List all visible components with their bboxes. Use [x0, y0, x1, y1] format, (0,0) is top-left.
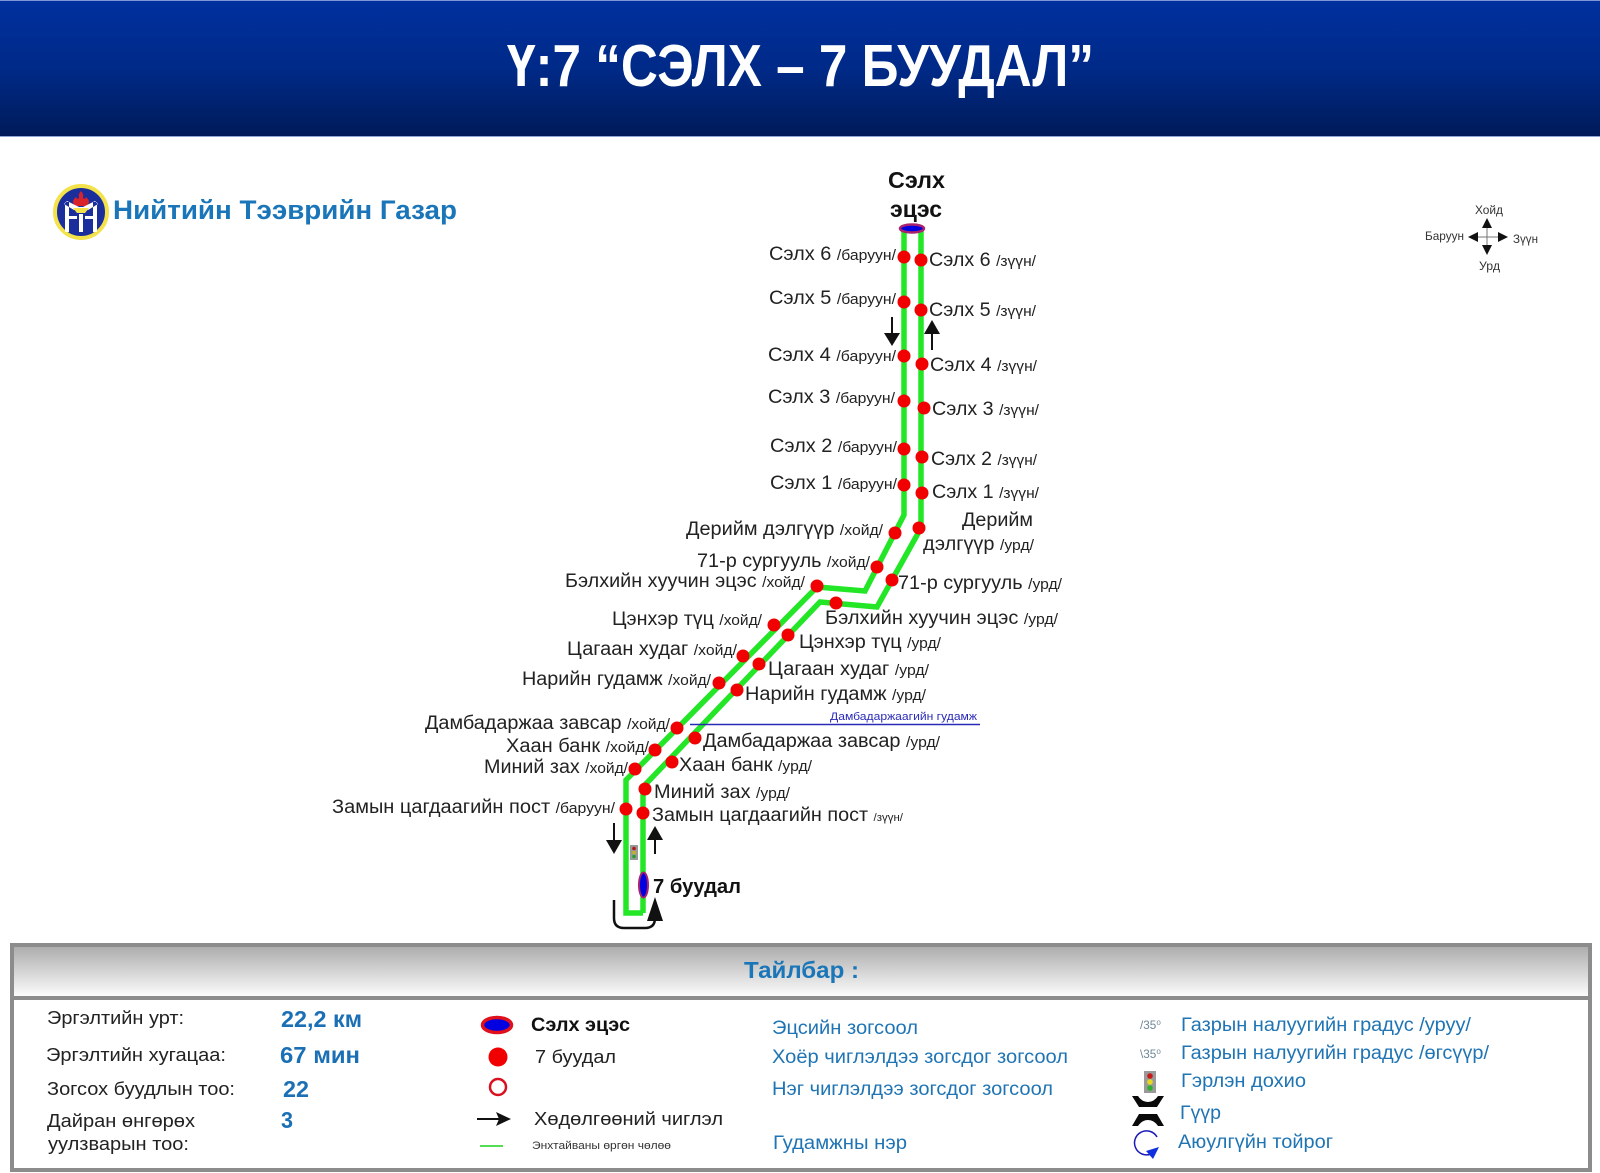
compass [1425, 203, 1538, 273]
route line: eastbound [643, 228, 921, 913]
map symbols [1132, 1015, 1490, 1159]
map symbols: \35⁰ [1140, 1047, 1161, 1061]
stop labels: east side: Сэлх 1 /зүүн/ [932, 482, 1040, 503]
stop labels: west side: Бэлхийн хуучин эцэс /хойд/ [565, 571, 806, 592]
stop type descriptions: Гудамжны нэр [773, 1133, 907, 1154]
icon: traffic light on route [630, 845, 638, 860]
route map [332, 167, 1063, 928]
route statistics: уулзварын тоо: [48, 1133, 189, 1154]
compass: Баруун [1425, 229, 1464, 243]
legend symbols: Энхтайваны өргөн чөлөө [532, 1140, 671, 1152]
title: Ү:7 “СЭЛХ – 7 БУУДАЛ” [507, 33, 1094, 99]
stop labels: east side: Сэлх 6 /зүүн/ [929, 250, 1037, 271]
street line: Дамбадаржаа: Дамбадаржаагийн гудамж [830, 711, 978, 723]
stop labels: west side: Сэлх 6 /баруун/ [769, 244, 897, 265]
stop labels: west side: Сэлх 3 /баруун/ [768, 387, 896, 408]
stop labels: east side: Дерийм [962, 510, 1033, 531]
arrow: northbound bottom [647, 826, 663, 854]
arrow: southbound bottom [606, 823, 622, 854]
stop type descriptions: Хоёр чиглэлдээ зогсдог зогсоол [772, 1047, 1068, 1068]
stop labels: west side: Цагаан худаг /хойд/ [567, 639, 738, 660]
route statistics: Зогсох буудлын тоо: [47, 1078, 235, 1099]
stop labels: west side: Хаан банк /хойд/ [506, 736, 650, 757]
map symbols: Аюулгүйн тойрог [1178, 1132, 1333, 1153]
stop labels: west side: Дерийм дэлгүүр /хойд/ [686, 519, 884, 540]
stop labels: west side: Замын цагдаагийн пост /баруун/ [332, 797, 616, 818]
stop labels: east side: Замын цагдаагийн пост /зүүн/ [652, 805, 904, 826]
compass: Хойд [1475, 203, 1503, 217]
stop labels: east side: 71-р сургууль /урд/ [898, 573, 1063, 594]
stop labels: west side: Сэлх 4 /баруун/ [768, 345, 897, 366]
arrow: southbound top [884, 317, 900, 346]
icon: roundabout [1135, 1131, 1159, 1159]
header banner [0, 0, 1600, 137]
compass: Зүүн [1513, 232, 1538, 246]
stop labels: east side: Сэлх 3 /зүүн/ [932, 399, 1040, 420]
map symbols: Гүүр [1180, 1103, 1221, 1124]
route statistics [46, 1006, 362, 1154]
icon: bridge [1132, 1096, 1164, 1126]
stop labels: west side: 71-р сургууль /хойд/ [697, 551, 871, 572]
route statistics: 67 мин [280, 1042, 360, 1068]
stop labels: east side: Сэлх 4 /зүүн/ [930, 355, 1038, 376]
stop type descriptions [772, 1018, 1068, 1154]
stops: east side [636, 254, 930, 820]
map symbols: /35⁰ [1140, 1018, 1161, 1032]
route line: westbound [626, 228, 904, 913]
stop labels: west side: Нарийн гудамж /хойд/ [522, 669, 712, 690]
stops: west side [620, 250, 910, 816]
logo and organisation name [55, 186, 457, 238]
stop labels: west side: Сэлх 2 /баруун/ [770, 436, 898, 457]
terminal: Сэлх эцэс: Сэлх [888, 167, 945, 193]
legend symbols [477, 1015, 723, 1152]
stop labels: east side: Цэнхэр түц /урд/ [799, 632, 942, 653]
stop labels: west side: Сэлх 5 /баруун/ [769, 288, 897, 309]
icon: traffic light [1144, 1071, 1156, 1093]
route statistics: 22 [283, 1076, 309, 1102]
icon: organisation emblem [55, 186, 107, 238]
stop labels: west side [332, 244, 898, 818]
route statistics: Эргэлтийн урт: [47, 1007, 184, 1028]
arrow: turnaround at 7 буудал [614, 897, 663, 928]
stop labels: east side: дэлгүүр /урд/ [923, 534, 1035, 555]
compass: Урд [1479, 259, 1500, 273]
stop labels: east side: Сэлх 2 /зүүн/ [931, 449, 1038, 470]
stop labels: west side: Дамбадаржаа завсар /хойд/ [425, 713, 671, 734]
stop labels: east side: Дамбадаржаа завсар /урд/ [703, 731, 941, 752]
legend symbols: 7 буудал [535, 1046, 616, 1067]
stop labels: west side: Миний зах /хойд/ [484, 757, 629, 778]
stop labels: east side: Нарийн гудамж /урд/ [745, 684, 927, 705]
stop labels: east side [652, 250, 1063, 826]
organisation name: Нийтийн Тээврийн Газар [113, 195, 457, 225]
map symbols: Газрын налуугийн градус /өгсүүр/ [1181, 1043, 1490, 1064]
map symbols: Газрын налуугийн градус /уруу/ [1181, 1015, 1472, 1036]
route statistics: 22,2 км [281, 1006, 362, 1032]
legend symbols: Хөдөлгөөний чиглэл [534, 1108, 723, 1129]
route statistics: Эргэлтийн хугацаа: [46, 1044, 226, 1065]
terminal: Сэлх эцэс: эцэс [890, 196, 942, 222]
terminal: Сэлх эцэс [888, 167, 945, 232]
terminal: 7 буудал: 7 буудал [653, 876, 741, 898]
legend symbols: Сэлх эцэс [531, 1015, 630, 1036]
stop labels: east side: Миний зах /урд/ [654, 782, 791, 803]
stop labels: east side: Сэлх 5 /зүүн/ [929, 300, 1037, 321]
stop labels: east side: Цагаан худаг /урд/ [768, 659, 930, 680]
legend header [14, 947, 1588, 1000]
stop labels: west side: Сэлх 1 /баруун/ [770, 473, 898, 494]
legend header: Тайлбар : [744, 957, 859, 983]
stop type descriptions: Эцсийн зогсоол [772, 1018, 918, 1039]
stop labels: east side: Бэлхийн хуучин эцэс /урд/ [825, 608, 1059, 629]
route statistics: Дайран өнгөрөх [47, 1110, 196, 1131]
legend panel [12, 945, 1590, 1170]
arrow: northbound top [924, 320, 940, 350]
stop labels: east side: Хаан банк /урд/ [679, 755, 813, 776]
map symbols: Гэрлэн дохио [1181, 1071, 1306, 1092]
stop labels: west side: Цэнхэр түц /хойд/ [612, 609, 763, 630]
route statistics: 3 [281, 1107, 293, 1133]
stop type descriptions: Нэг чиглэлдээ зогсдог зогсоол [772, 1079, 1053, 1100]
